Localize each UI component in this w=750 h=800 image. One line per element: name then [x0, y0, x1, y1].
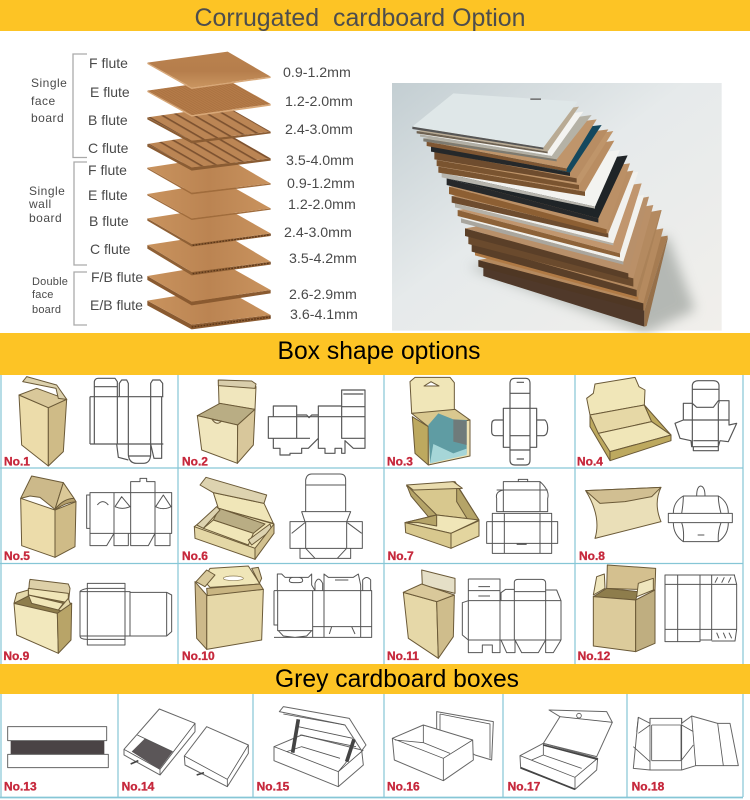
- box No.15: No.15: [257, 780, 290, 794]
- banner: Box shape options: [0, 333, 750, 375]
- box No.4: [577, 377, 737, 468]
- flute names: [88, 55, 143, 313]
- group label: Single face board: face: [31, 94, 56, 108]
- flute names: B flute: [88, 112, 128, 128]
- box No.12: [578, 565, 737, 663]
- box No.9: [3, 579, 172, 663]
- thickness values: 3.6-4.1mm: [290, 307, 358, 323]
- box shape grid lines: [0, 375, 743, 664]
- group label: Double face board: face: [32, 289, 54, 301]
- group label: Single wall board: wall: [28, 197, 52, 211]
- box No.8: No.8: [579, 549, 605, 563]
- box No.2: No.2: [182, 454, 208, 468]
- photo: stack of cardboard sheets: [392, 83, 722, 333]
- box No.18: No.18: [632, 780, 665, 794]
- thickness values: 3.5-4.0mm: [286, 153, 354, 169]
- banner: Box shape options: Box shape options: [278, 337, 480, 365]
- flute names: E flute: [88, 187, 128, 203]
- banner: Corrugated cardboard Option: [0, 0, 750, 32]
- thickness values: 2.4-3.0mm: [285, 122, 353, 138]
- group label: Single face board: Single: [31, 76, 67, 90]
- box No.9: No.9: [3, 649, 30, 663]
- flute names: E/B flute: [90, 297, 143, 313]
- box No.11: No.11: [387, 649, 419, 663]
- group label: Double face board: Double: [32, 276, 68, 288]
- box No.7: [388, 479, 558, 563]
- box No.14: [122, 709, 248, 794]
- box No.13: [4, 727, 108, 794]
- box No.17: No.17: [508, 780, 541, 794]
- box No.10: No.10: [182, 649, 215, 663]
- box No.12: No.12: [578, 649, 611, 663]
- banner: Corrugated cardboard Option: Corrugated cardboard Option: [194, 4, 526, 32]
- thickness values: 2.6-2.9mm: [289, 287, 357, 303]
- thickness values: 1.2-2.0mm: [285, 94, 353, 110]
- box No.5: [4, 476, 172, 563]
- group label: Double face board: board: [32, 304, 61, 316]
- thickness values: 2.4-3.0mm: [284, 225, 352, 241]
- group label: Single face board: board: [31, 111, 64, 125]
- box No.1: No.1: [4, 454, 30, 468]
- box No.16: No.16: [387, 780, 420, 794]
- thickness values: 1.2-2.0mm: [288, 197, 356, 213]
- flute names: F flute: [88, 162, 127, 178]
- box No.13: No.13: [4, 780, 37, 794]
- box No.6: No.6: [182, 549, 208, 563]
- flute names: F flute: [89, 55, 128, 71]
- flute names: B flute: [89, 213, 129, 229]
- thickness values: 0.9-1.2mm: [287, 176, 355, 192]
- box No.6: [182, 474, 362, 563]
- box No.7: No.7: [388, 549, 414, 563]
- brackets: [73, 54, 87, 325]
- box No.17: [508, 710, 612, 794]
- banner: Grey cardboard boxes: [0, 664, 750, 694]
- thickness values: [283, 65, 358, 323]
- box No.16: [387, 712, 493, 794]
- panel: flute layers diagram: [28, 52, 358, 329]
- group label: Single wall board: Single: [29, 184, 65, 198]
- box No.10: [182, 566, 372, 663]
- box No.15: [257, 707, 366, 794]
- flute layer stack: [147, 52, 271, 329]
- thickness values: 3.5-4.2mm: [289, 251, 357, 267]
- flute names: C flute: [88, 140, 129, 156]
- flute names: C flute: [90, 241, 131, 257]
- group label: Single wall board: board: [29, 211, 62, 225]
- box No.11: [387, 570, 561, 663]
- flute names: F/B flute: [91, 269, 143, 285]
- box No.4: No.4: [577, 454, 603, 468]
- box No.18: [632, 716, 738, 794]
- box No.3: No.3: [387, 454, 413, 468]
- box No.14: No.14: [122, 780, 155, 794]
- box No.2: [182, 380, 365, 468]
- flute names: E flute: [90, 84, 130, 100]
- banner: Grey cardboard boxes: Grey cardboard boxes: [275, 665, 519, 693]
- box No.3: [387, 377, 548, 468]
- box No.8: [579, 486, 732, 563]
- box No.5: No.5: [4, 549, 30, 563]
- grey box grid lines: [1, 694, 743, 797]
- thickness values: 0.9-1.2mm: [283, 65, 351, 81]
- box No.1: [4, 377, 163, 468]
